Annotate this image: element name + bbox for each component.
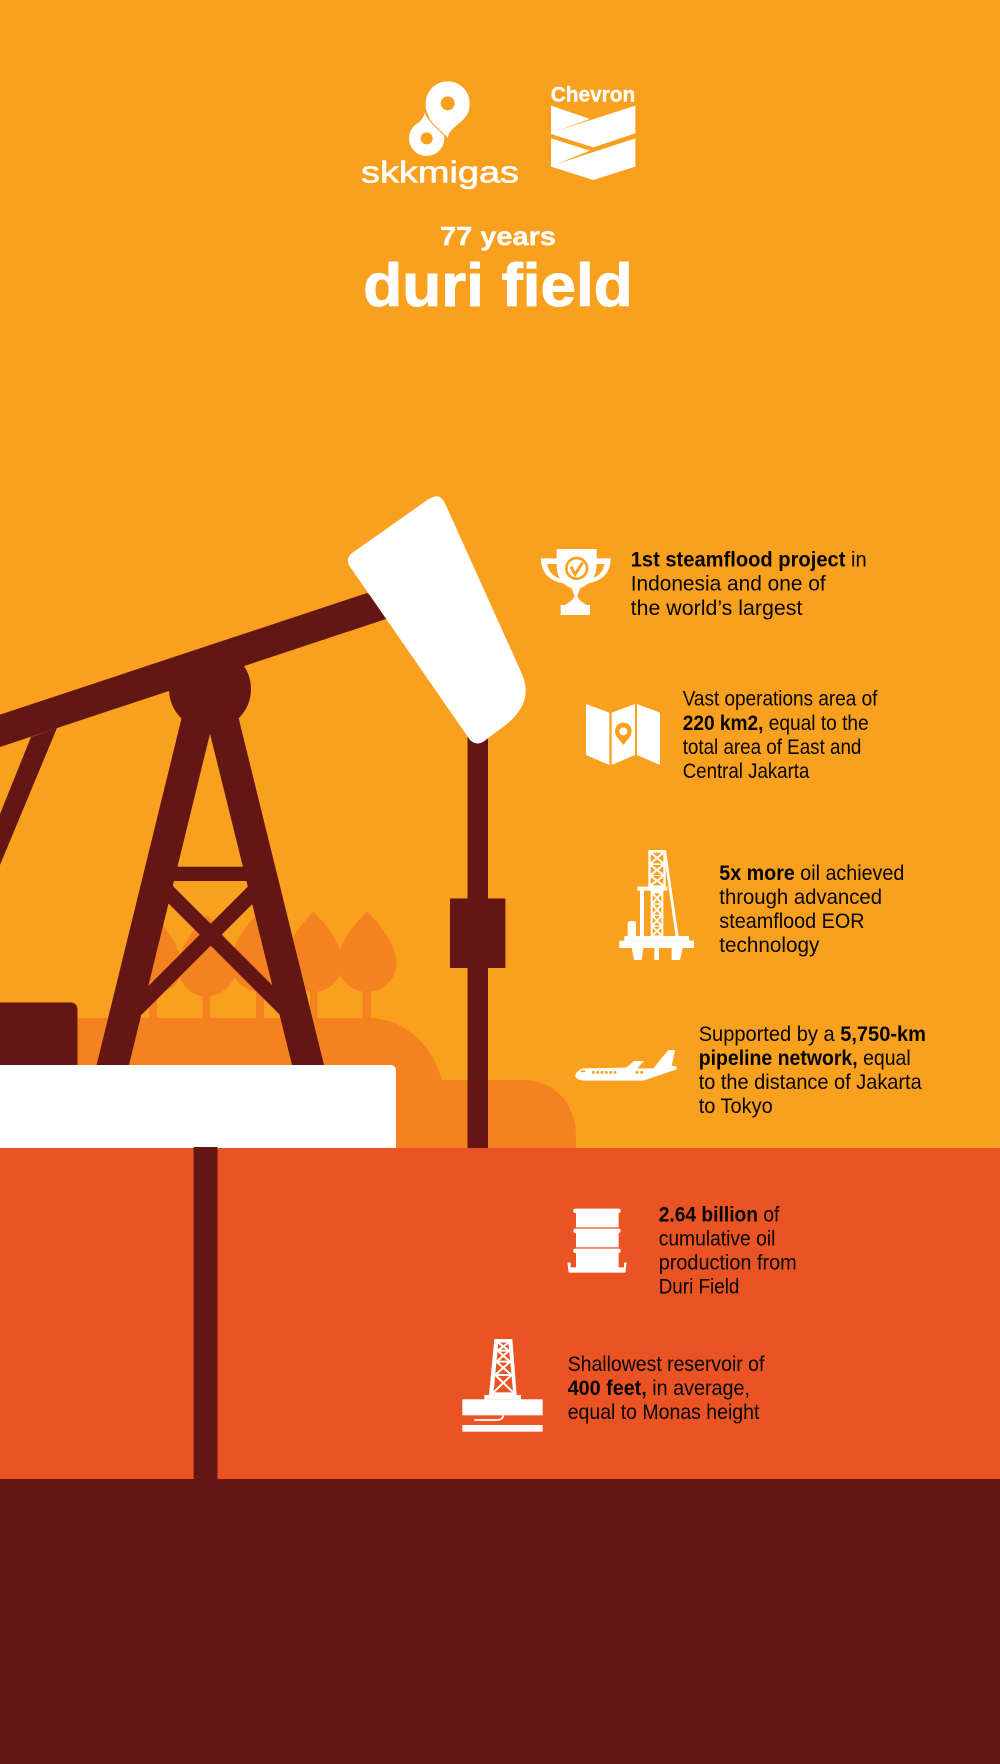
- illustration: hills: [0, 1018, 576, 1148]
- text: EOR technology: 5x more oil achieved: [719, 862, 904, 885]
- text: steamflood project: [631, 549, 867, 620]
- illustration: pump rod with counterweight block: [450, 730, 505, 1148]
- illustration: horsehead: [348, 496, 526, 743]
- text: EOR technology: technology: [719, 934, 820, 957]
- text: pipeline network: Supported by a 5,750-km: [699, 1023, 926, 1046]
- illustration: trees: [124, 912, 396, 1020]
- text: cumulative production: production from: [659, 1252, 797, 1275]
- icon: offshore rig: [619, 850, 694, 960]
- logo: skkmigas: [361, 81, 519, 190]
- text: pipeline network: [699, 1023, 926, 1118]
- text: steamflood project: 1st steamflood project in: [631, 549, 867, 572]
- text: EOR technology: [719, 862, 904, 957]
- logo: skkmigas: skkmigas: [361, 155, 519, 190]
- text: shallowest reservoir: equal to Monas height: [568, 1401, 760, 1424]
- text: operations area: Central Jakarta: [683, 760, 810, 783]
- fact: shallowest reservoir: [462, 1339, 765, 1432]
- icon: oil barrels: [567, 1209, 627, 1273]
- logo: Chevron: [551, 84, 635, 180]
- text: shallowest reservoir: [568, 1353, 765, 1424]
- text: operations area: 220 km2, equal to the: [683, 712, 869, 735]
- logo: Chevron: Chevron: [551, 84, 635, 107]
- icon: derrick: [462, 1339, 543, 1432]
- icon: map: [586, 704, 660, 765]
- fact: operations area: [586, 688, 878, 783]
- text: shallowest reservoir: 400 feet, in average,: [568, 1377, 750, 1400]
- background: sky: [0, 0, 1000, 1148]
- illustration: well pipe underground: [194, 1147, 218, 1479]
- text: operations area: Vast operations area of: [683, 688, 878, 711]
- text: operations area: total area of East and: [683, 736, 861, 759]
- background: dark bottom layer: [0, 1479, 1000, 1764]
- text: shallowest reservoir: Shallowest reservoir of: [568, 1353, 765, 1376]
- text: steamflood project: Indonesia and one of: [631, 573, 826, 596]
- title: duri field: duri field: [363, 252, 633, 319]
- fact: EOR technology: [619, 850, 904, 960]
- text: steamflood project: the world’s largest: [631, 597, 803, 620]
- illustration: white base platform: [0, 1065, 396, 1148]
- text: EOR technology: through advanced: [719, 886, 882, 909]
- text: cumulative production: 2.64 billion of: [659, 1204, 780, 1227]
- fact: steamflood project: [541, 549, 867, 620]
- text: cumulative production: cumulative oil: [659, 1228, 775, 1251]
- text: cumulative production: [659, 1204, 797, 1299]
- text: operations area: [683, 688, 878, 783]
- text: pipeline network: pipeline network, equal: [699, 1047, 911, 1070]
- icon: airplane: [575, 1050, 677, 1081]
- text: cumulative production: Duri Field: [659, 1276, 739, 1299]
- text: EOR technology: steamflood EOR: [719, 910, 865, 933]
- fact: cumulative production: [567, 1204, 797, 1299]
- fact: pipeline network: [575, 1023, 926, 1118]
- heading: 77 years: 77 years: [440, 221, 556, 251]
- text: pipeline network: to the distance of Jakarta: [699, 1071, 922, 1094]
- text: pipeline network: to Tokyo: [699, 1095, 773, 1118]
- illustration: pumpjack frame: [0, 593, 395, 1065]
- illustration: motor box: [0, 1002, 78, 1066]
- background: red soil layer: [0, 1148, 1000, 1479]
- icon: trophy: [541, 549, 611, 615]
